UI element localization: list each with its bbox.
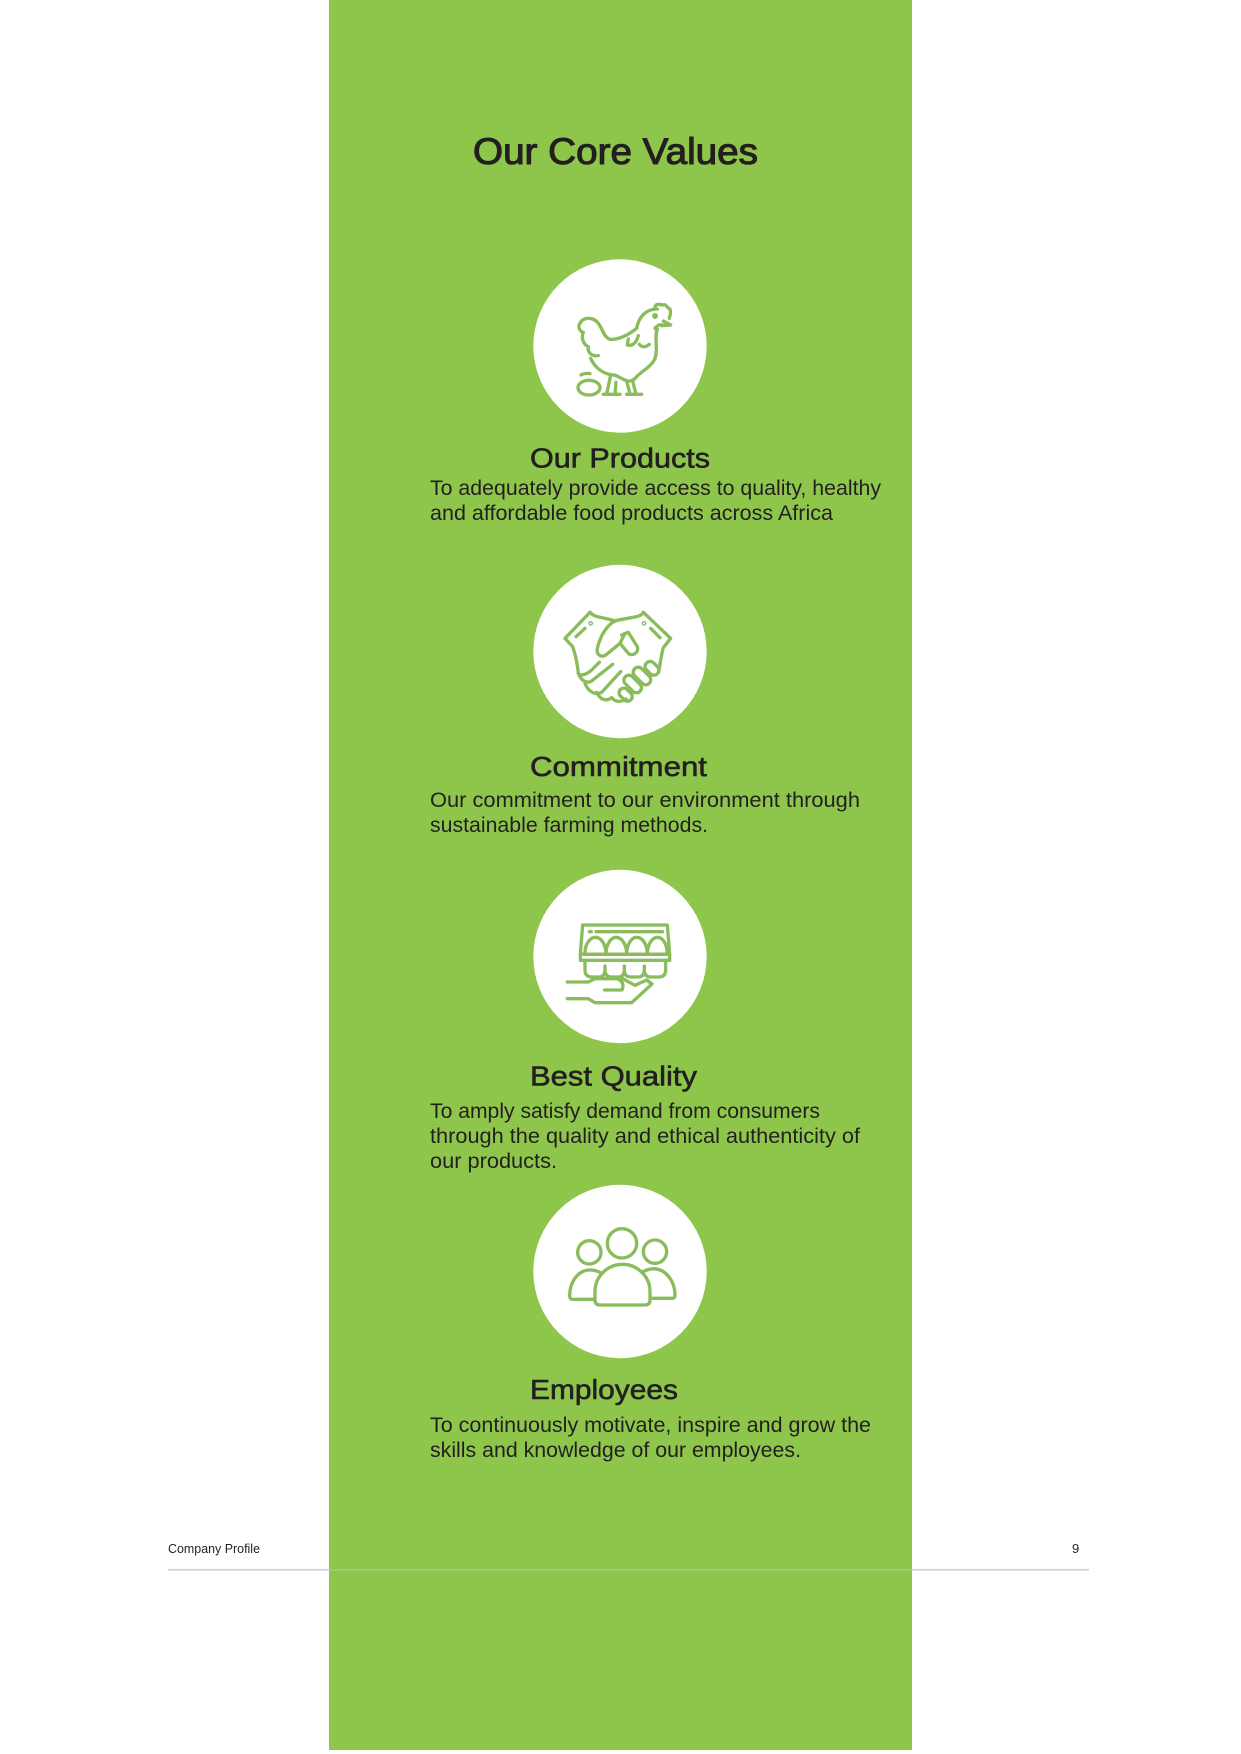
icon circle: hen — [533, 259, 707, 433]
text: commitment description — [430, 788, 860, 837]
text: our products description: To adequately provide access to quality, healthy — [430, 476, 881, 500]
heading: employees: Employees — [530, 1374, 678, 1405]
text: commitment description: Our commitment to our environment through — [430, 788, 860, 812]
panel: employees — [430, 1185, 871, 1462]
panel: best quality — [430, 870, 860, 1173]
text: best quality description — [430, 1099, 860, 1173]
panel: our products — [430, 259, 881, 525]
text: employees description: skills and knowledge of our employees. — [430, 1438, 801, 1462]
text: best quality description: our products. — [430, 1149, 557, 1173]
heading: commitment: Commitment — [530, 751, 707, 782]
text: employees description — [430, 1413, 871, 1462]
text: employees description: To continuously motivate, inspire and grow the — [430, 1413, 871, 1437]
icon circle: egg carton — [533, 870, 707, 1043]
panel: commitment — [430, 565, 860, 837]
footer: page number: 9 — [1072, 1541, 1079, 1556]
icon: handshake — [565, 612, 671, 703]
footer: company profile label: Company Profile — [168, 1541, 260, 1556]
text: our products description — [430, 476, 881, 525]
icon: egg carton on hand — [567, 925, 670, 1003]
text: our products description: and affordable food products across Africa — [430, 501, 833, 525]
panel: green column — [329, 0, 912, 1750]
heading: best quality: Best Quality — [530, 1060, 697, 1092]
text: commitment description: sustainable farming methods. — [430, 813, 708, 837]
heading: our products: Our Products — [530, 442, 710, 474]
text: best quality description: To amply satisfy demand from consumers — [430, 1099, 820, 1123]
icon: group of people — [570, 1229, 675, 1305]
text: best quality description: through the quality and ethical authenticity of — [430, 1124, 860, 1148]
title: Our Core Values — [473, 131, 758, 172]
icon: hen and egg — [578, 304, 671, 395]
icon circle: people — [533, 1185, 707, 1358]
icon circle: handshake — [533, 565, 707, 738]
